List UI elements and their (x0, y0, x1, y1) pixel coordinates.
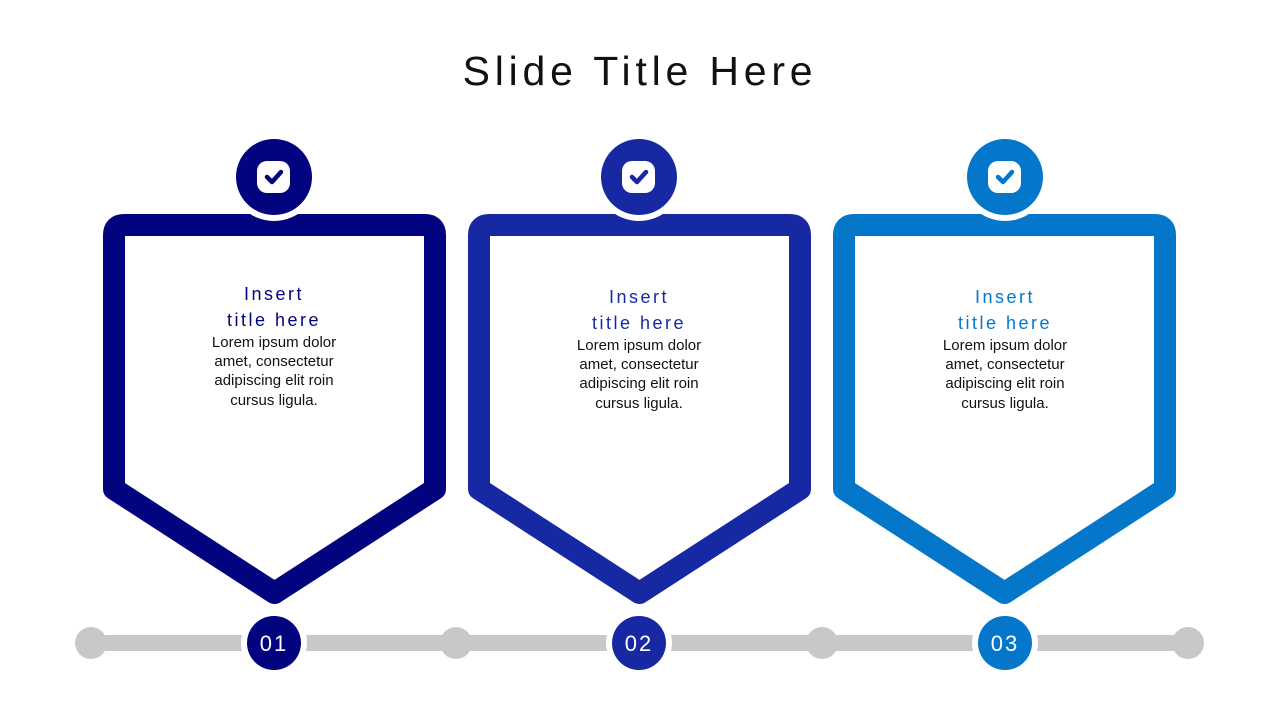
text: step 1: Lorem ipsum dolor (212, 334, 336, 351)
text: step 3 (943, 287, 1067, 412)
text: step 1: adipiscing elit roin (214, 372, 334, 389)
text: step 2: Insert (609, 287, 669, 307)
text: step 2: amet, consectetur (579, 356, 699, 373)
text: step 1: Insert (244, 284, 304, 304)
number badge 2 (606, 610, 672, 676)
text: step 1 (212, 284, 336, 409)
panel: step 1 (114, 133, 435, 676)
icon: check badge 2 (595, 133, 683, 221)
text: step 1: cursus ligula. (230, 392, 318, 409)
text: step 3: title here (958, 313, 1052, 333)
icon: check badge 1 (230, 133, 318, 221)
panel: step 2 (479, 133, 800, 676)
number badge 1: 01 (260, 631, 288, 656)
text: step 3: Lorem ipsum dolor (943, 337, 1067, 354)
panel: step 3 (844, 133, 1165, 676)
text: step 2: title here (592, 313, 686, 333)
icon: check badge 3 (961, 133, 1049, 221)
text: step 3: amet, consectetur (945, 356, 1065, 373)
number badge 3: 03 (991, 631, 1019, 656)
title: Slide Title Here (463, 48, 817, 94)
text: step 2: adipiscing elit roin (579, 375, 699, 392)
number badge 2: 02 (625, 631, 653, 656)
text: step 1: amet, consectetur (214, 353, 334, 370)
text: step 3: Insert (975, 287, 1035, 307)
text: step 2: cursus ligula. (595, 395, 683, 412)
text: step 3: cursus ligula. (961, 395, 1049, 412)
text: step 3: adipiscing elit roin (945, 375, 1065, 392)
timeline (75, 627, 1204, 659)
number badge 1 (241, 610, 307, 676)
number badge 3 (972, 610, 1038, 676)
text: step 2 (577, 287, 701, 412)
text: step 1: title here (227, 310, 321, 330)
text: step 2: Lorem ipsum dolor (577, 337, 701, 354)
